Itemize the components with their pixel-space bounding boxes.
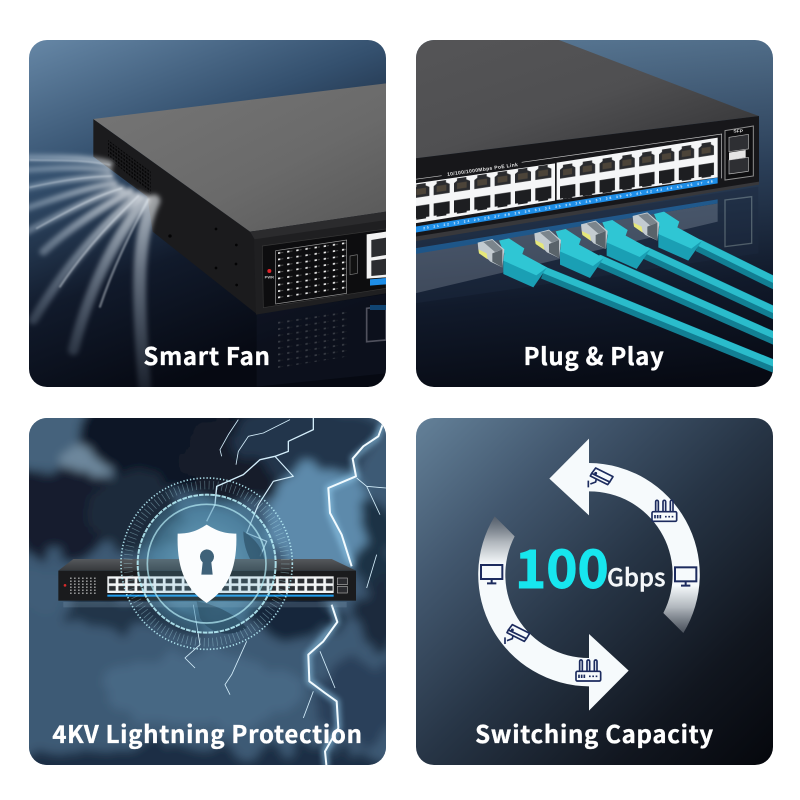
shield icon	[178, 525, 236, 603]
panel background	[29, 40, 386, 387]
RJ45 uplink ports	[367, 232, 386, 279]
left port block	[415, 163, 555, 223]
icon: router upper	[652, 500, 677, 521]
switch front	[254, 220, 386, 315]
keyhole	[200, 549, 214, 575]
panel: 4KV Lightning Protection	[0, 368, 463, 800]
SFP cage	[725, 126, 753, 180]
right ports	[560, 142, 714, 199]
switch body illustration	[17, 83, 386, 390]
panel: Smart Fan	[17, 40, 386, 390]
SFP ports	[729, 134, 748, 174]
reflection of switch	[257, 294, 386, 387]
circular arrows diagram	[478, 439, 700, 711]
port block	[107, 576, 334, 593]
blue strip	[107, 595, 334, 597]
upper arrow	[549, 439, 700, 633]
globe tint over switch	[138, 495, 275, 632]
icon: monitor left	[481, 565, 502, 583]
icon: monitor right	[675, 567, 696, 586]
globe land shapes	[197, 531, 265, 634]
cable 3	[581, 220, 777, 314]
vent grille	[108, 140, 151, 194]
panel: Plug & Play	[415, 40, 777, 387]
speed label: 10/100/1000Mbps PoE Link	[447, 162, 518, 178]
screws	[168, 228, 238, 286]
lower lip	[415, 182, 759, 241]
storm illustration	[0, 368, 463, 800]
port numbers: 20 21 22 23 24 25 26 27 28 29 30 31 32 33 34 35 36 37 38 39 40 41 42 43 44 45 46 47 48	[423, 179, 713, 230]
storm clouds	[0, 368, 463, 800]
left ports	[416, 164, 552, 220]
branch lightning	[185, 418, 386, 718]
panel background	[416, 418, 773, 765]
main lightning bolt	[308, 423, 383, 768]
capacity unit: Gbps	[607, 558, 666, 593]
icon: camera lower	[505, 625, 530, 644]
icon: camera upper	[588, 468, 613, 487]
airflow highlights	[30, 160, 148, 307]
icon: router lower	[576, 660, 601, 681]
front inset	[262, 229, 386, 308]
power label: PWR	[265, 275, 274, 280]
heading: Switching Capacity: Switching Capacity	[475, 715, 714, 750]
network switch front	[58, 571, 356, 601]
reflection of switch	[416, 196, 752, 294]
panel: Switching Capacity	[416, 418, 773, 765]
lower arrow	[478, 516, 629, 711]
panel background	[416, 40, 773, 387]
cable 4	[633, 212, 777, 284]
right port block	[557, 138, 718, 200]
network switch top	[58, 559, 356, 571]
switch lip	[250, 212, 386, 240]
panel background	[29, 418, 386, 765]
power LED	[64, 584, 66, 587]
heading: Smart Fan: Smart Fan	[143, 337, 271, 372]
capacity figure: 100	[515, 528, 609, 604]
cable 1	[478, 238, 777, 367]
switch top	[415, 40, 759, 158]
switch front	[415, 116, 759, 241]
switch reflection	[63, 602, 347, 607]
switch side	[93, 119, 257, 314]
switch and cables illustration	[415, 40, 777, 367]
blue port label	[370, 278, 386, 286]
airflow streams	[17, 157, 154, 390]
heading: Plug & Play: Plug & Play	[523, 337, 665, 372]
LED block	[68, 576, 98, 595]
SFP ports	[337, 578, 347, 593]
blue number strip	[415, 178, 718, 233]
port cutouts	[371, 238, 386, 276]
power LED	[267, 269, 271, 273]
heading: 4KV Lightning Protection: 4KV Lightning Protection	[52, 715, 363, 750]
globe	[138, 495, 275, 632]
LED matrix	[276, 240, 347, 304]
mode buttons	[350, 255, 357, 275]
SFP label: SFP	[733, 129, 744, 135]
LED dots	[277, 241, 346, 303]
switch top	[93, 83, 386, 232]
front frame line	[415, 134, 722, 179]
protective rings	[121, 478, 292, 649]
cable 2	[534, 229, 777, 339]
lightning glow	[308, 423, 383, 768]
